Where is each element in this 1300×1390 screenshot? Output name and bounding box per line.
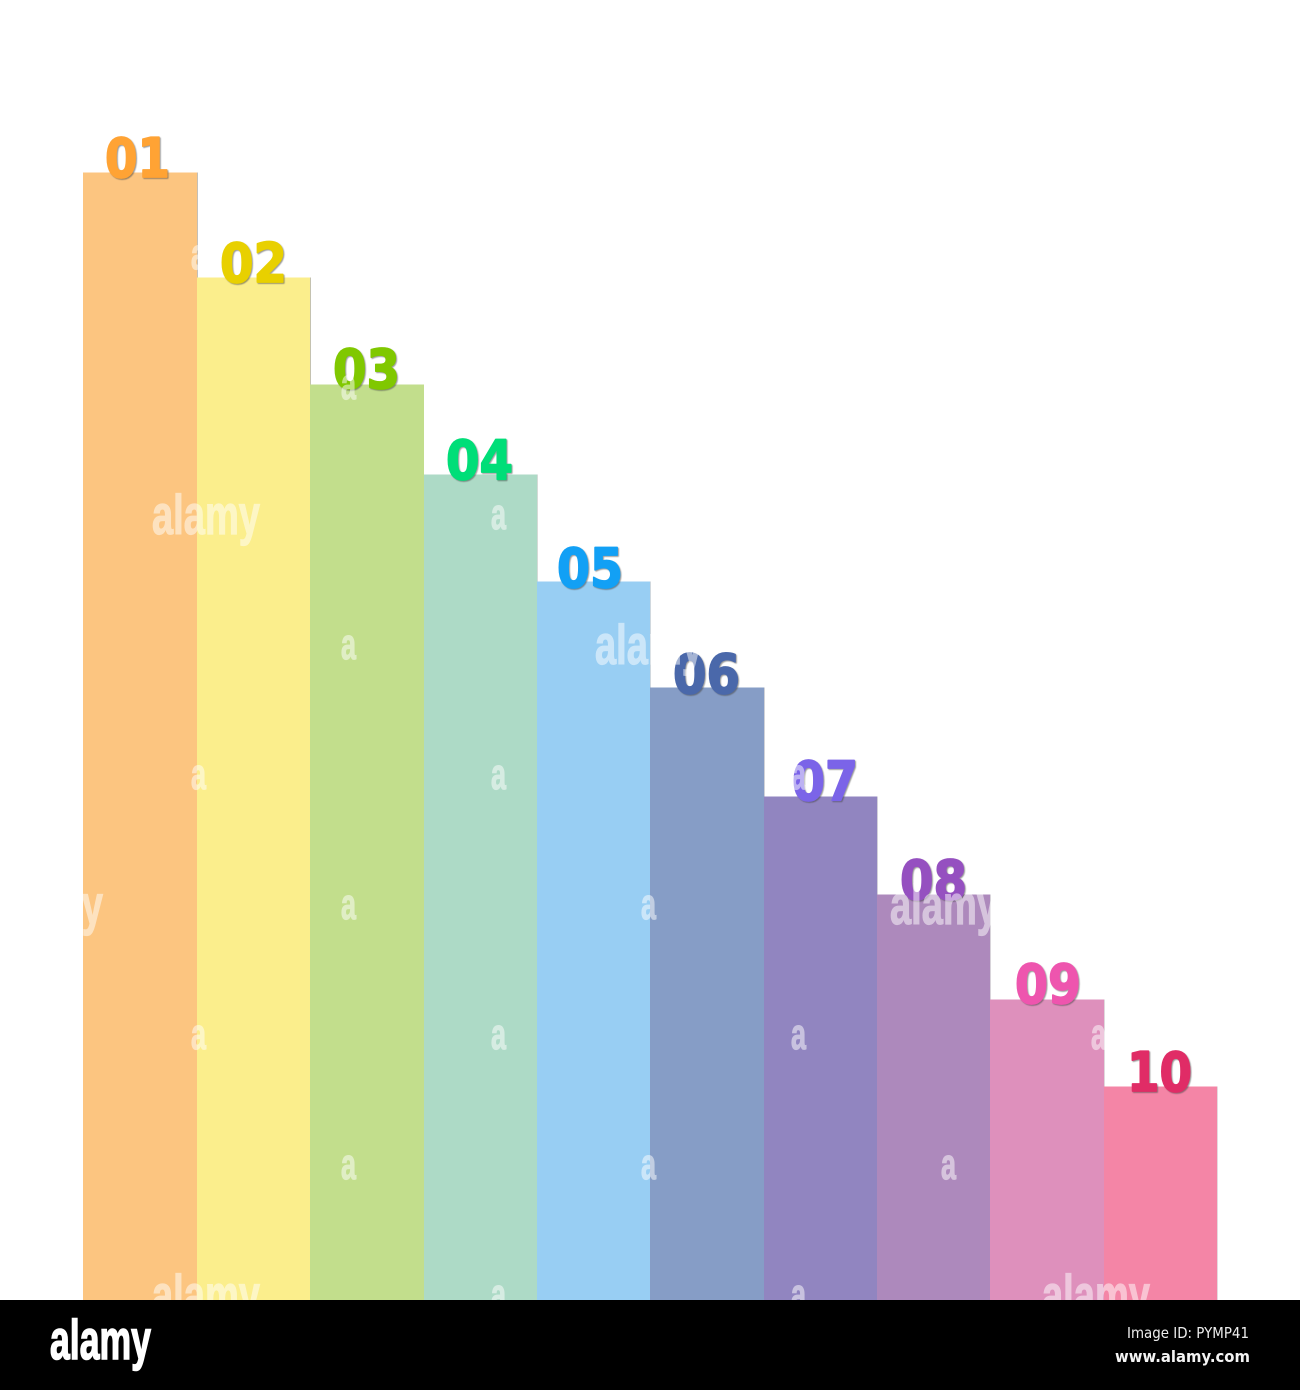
bar 05: [537, 582, 650, 1300]
number 02: 02: [220, 232, 287, 295]
number 08: 08: [900, 849, 967, 912]
watermark overlay: alamy: [595, 613, 703, 676]
bar 04: [424, 474, 538, 1300]
bar 03: [310, 384, 424, 1300]
staircase bar chart: [83, 172, 1218, 1300]
watermark overlay: a: [791, 1270, 806, 1319]
watermark overlay: a: [641, 880, 656, 929]
footer bar: [0, 1300, 1300, 1390]
watermark overlay: a: [491, 750, 506, 799]
watermark overlay: alamy: [152, 483, 260, 546]
number 09: 09: [1015, 953, 1081, 1016]
number 10: 10: [1127, 1041, 1192, 1104]
watermark overlay: a: [341, 360, 356, 409]
number 01: 01: [105, 127, 170, 190]
bar 07: [764, 796, 878, 1300]
watermark overlay: a: [641, 1140, 656, 1189]
watermark overlay: alamy: [1042, 1263, 1150, 1326]
number 04: 04: [446, 429, 513, 492]
watermark overlay: a: [1091, 1010, 1106, 1059]
watermark overlay: a: [791, 750, 806, 799]
bar 10: [1104, 1086, 1218, 1300]
watermark overlay: a: [191, 1010, 206, 1059]
number 05: 05: [557, 537, 623, 600]
watermark overlay: a: [341, 1140, 356, 1189]
watermark overlay: [0, 230, 1150, 1326]
watermark overlay: a: [491, 1010, 506, 1059]
watermark overlay: a: [191, 750, 206, 799]
number 07: 07: [792, 750, 858, 813]
bar 02: [197, 278, 311, 1300]
website url: www.alamy.com: [1115, 1347, 1250, 1366]
watermark overlay: a: [191, 230, 206, 279]
bar 08: [877, 894, 990, 1300]
logo: alamy: alamy: [50, 1308, 151, 1371]
watermark overlay: a: [491, 490, 506, 539]
number 03: 03: [333, 338, 400, 401]
number 06: 06: [673, 643, 740, 706]
bar 09: [990, 1000, 1104, 1300]
watermark overlay: alamy: [152, 1263, 260, 1326]
watermark overlay: a: [341, 880, 356, 929]
image id: Image ID: PYMP41: [1127, 1324, 1249, 1342]
watermark overlay: a: [941, 1140, 956, 1189]
bar 06: [650, 688, 764, 1300]
bar numbers: [105, 127, 1192, 1104]
watermark overlay: a: [341, 620, 356, 669]
watermark overlay: a: [491, 1270, 506, 1319]
watermark overlay: alamy: [890, 873, 998, 936]
watermark overlay: a: [791, 1010, 806, 1059]
bar 01: [83, 172, 198, 1300]
